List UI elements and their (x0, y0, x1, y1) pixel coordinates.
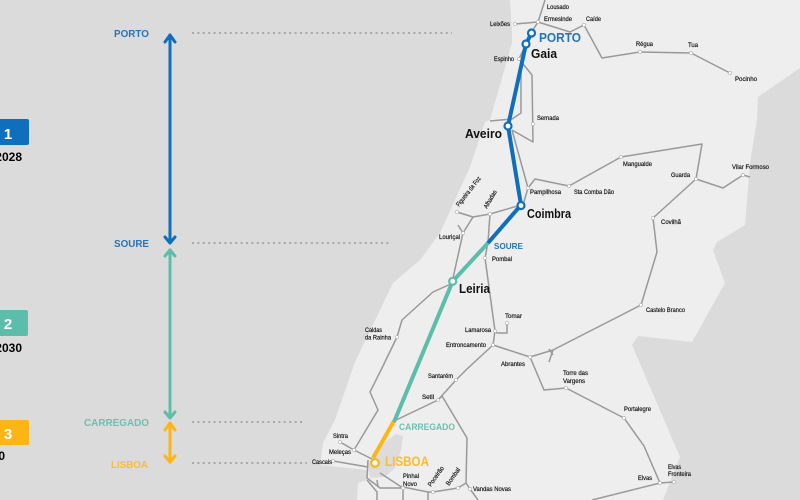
dotted guide: Soure (192, 242, 391, 244)
axis label: Porto: PORTO (114, 28, 149, 40)
secondary station labels: Portalegre (624, 406, 651, 413)
secondary station labels: Setil (422, 394, 435, 401)
secondary station labels: Alhadas (483, 189, 499, 210)
secondary station labels: Lousado (547, 4, 569, 11)
main station labels: PORTO (539, 30, 581, 45)
secondary station labels: Pocinho (735, 76, 757, 83)
secondary station labels: Abrantes (501, 361, 526, 368)
secondary station labels: Mangualde (623, 161, 652, 168)
secondary station labels: Espinho (494, 56, 514, 63)
secondary station labels: Louriçal (439, 234, 461, 241)
main station labels: Coimbra (527, 207, 572, 221)
dotted guide: Lisboa (192, 462, 307, 464)
secondary station labels: Pampilhosa (530, 189, 561, 196)
secondary station labels: Elvas (668, 464, 682, 471)
secondary station labels: Sintra (333, 433, 348, 440)
map: land area (320, 0, 800, 500)
arrow: Porto to Soure (165, 35, 175, 243)
main station labels: Leiria (459, 282, 491, 296)
high-speed line: phase 1 blue (488, 33, 532, 243)
secondary station labels: da Rainha (365, 334, 391, 342)
secondary station labels: Leixões (490, 21, 511, 28)
secondary station labels: Cascais (312, 459, 333, 466)
arrow: Soure to Carregado (165, 250, 175, 418)
main station labels: SOURE (494, 241, 523, 251)
secondary station labels: Caíde (586, 16, 601, 23)
secondary station labels: Elvas (638, 475, 653, 482)
phase 1 badge: 1 (4, 126, 12, 143)
secondary station labels: Fronteira (668, 471, 691, 478)
map: Tejo estuary (368, 434, 403, 478)
secondary station labels: Sernada (537, 115, 559, 122)
main station labels: LISBOA (385, 454, 429, 469)
stations on the conventional network (331, 20, 745, 494)
secondary station labels: Tua (688, 42, 698, 49)
main stations (371, 30, 535, 467)
high-speed line: phase 2 green (394, 243, 488, 422)
secondary station labels: Sta Comba Dão (574, 189, 614, 196)
secondary station labels: Vargens (563, 378, 586, 385)
main station labels: CARREGADO (399, 422, 455, 432)
arrow: Carregado to Lisboa (165, 423, 175, 462)
secondary station labels: Novo (403, 481, 417, 488)
phase 3 badge (0, 420, 29, 463)
axis label: Soure: SOURE (114, 238, 149, 250)
secondary station labels: Castelo Branco (646, 307, 685, 314)
secondary station labels: Régua (636, 41, 653, 48)
secondary station labels: Pinhal (403, 473, 419, 480)
secondary station labels: Poceirão (427, 465, 446, 488)
phase 3 badge: 3 (4, 426, 12, 443)
main station labels: Gaia (531, 46, 558, 61)
axis label: Carregado: CARREGADO (84, 417, 149, 429)
dotted guide: Carregado (192, 421, 305, 423)
axis label: Lisboa: LISBOA (111, 459, 148, 471)
conventional rail network (333, 0, 750, 500)
secondary station labels: Lamarosa (465, 327, 491, 334)
secondary station labels: Vilar Formoso (732, 164, 769, 171)
secondary station labels: Entroncamento (446, 342, 486, 349)
dotted guide: Porto (192, 32, 452, 34)
secondary station labels: Meleças (329, 449, 352, 456)
secondary station labels: Covilhã (661, 219, 681, 226)
secondary station labels: Caldas (365, 327, 383, 334)
secondary station labels: Guarda (671, 172, 690, 179)
main station labels: Aveiro (465, 127, 502, 141)
secondary station labels: Figueira da Foz (455, 176, 483, 208)
secondary station labels (312, 4, 769, 493)
secondary station labels: Santarém (428, 373, 453, 380)
main station labels (385, 30, 581, 469)
secondary station labels: Ermesinde (544, 16, 572, 23)
phase 1 badge (0, 119, 29, 164)
secondary station labels: Pombal (492, 256, 512, 263)
secondary station labels: Tomar (505, 313, 523, 320)
secondary station labels: Bombal (445, 466, 462, 487)
phase 2 badge (0, 310, 28, 355)
phase 2 badge: 2 (4, 316, 12, 333)
high-speed line: phase 3 yellow (373, 421, 394, 458)
secondary station labels: Vandas Novas (473, 486, 512, 493)
secondary station labels: Torre das (563, 370, 589, 377)
